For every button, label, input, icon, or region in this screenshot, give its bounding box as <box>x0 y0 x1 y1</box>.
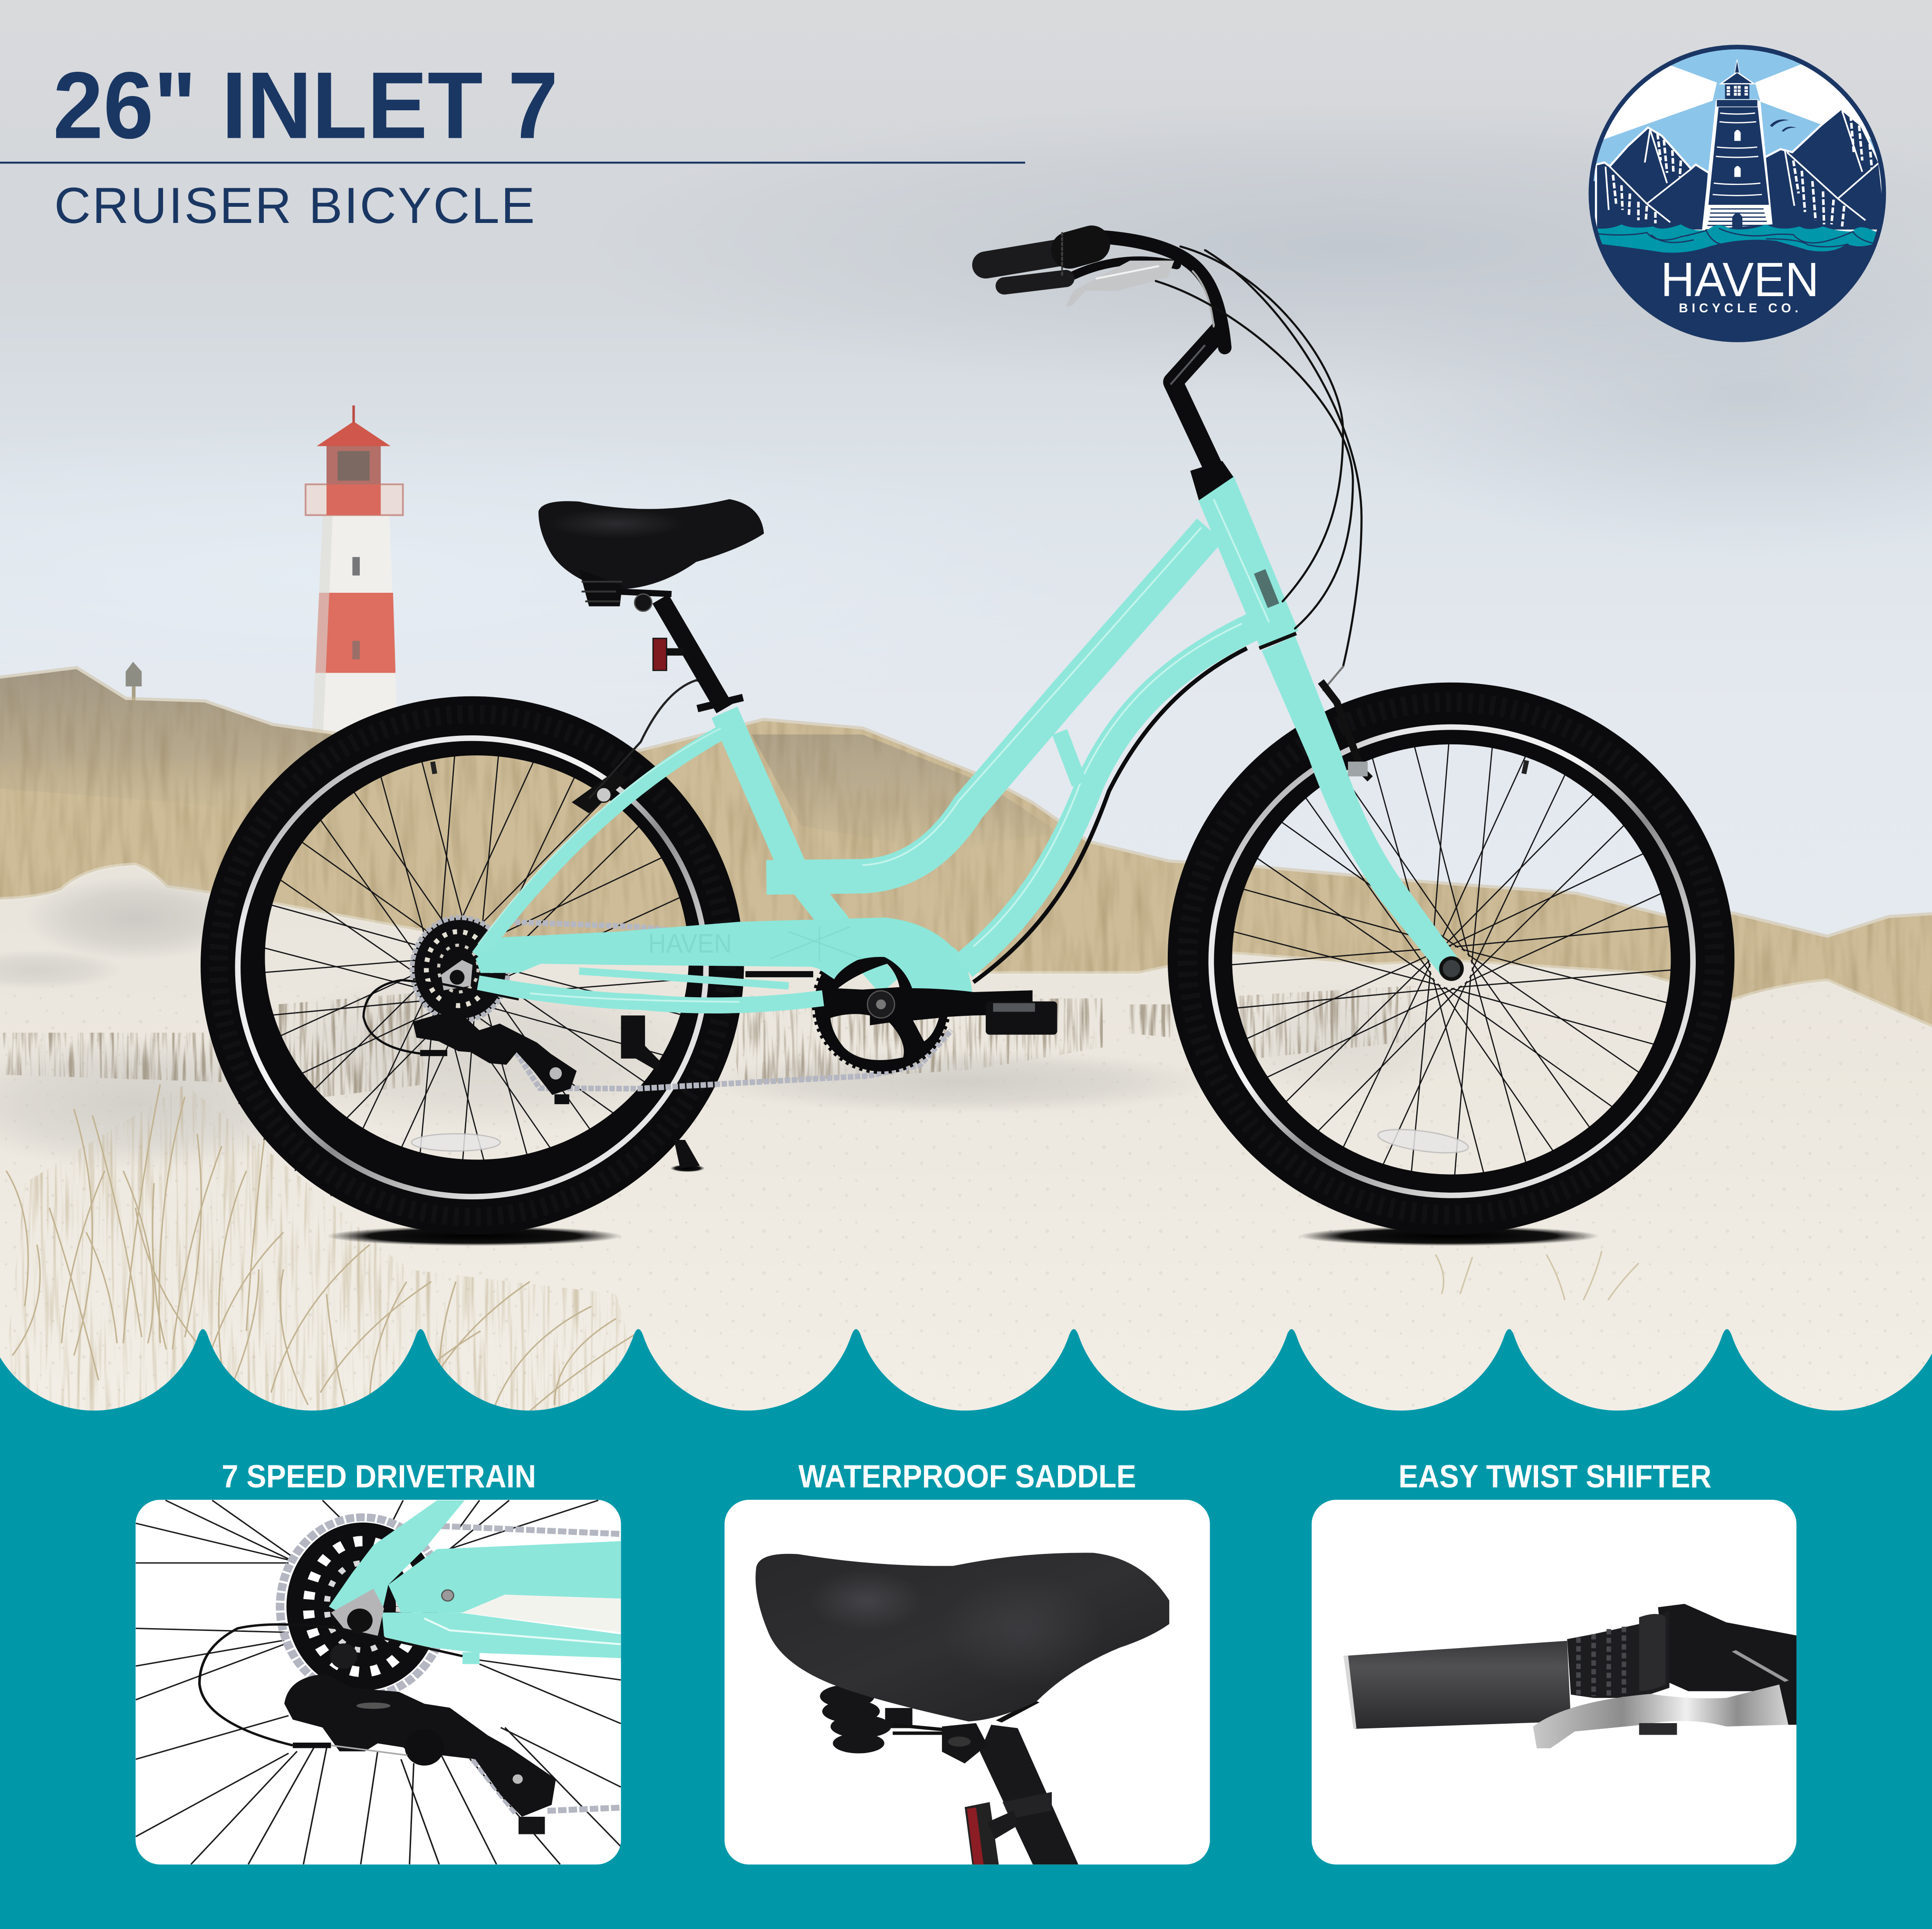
drivetrain spokes <box>136 1500 621 1864</box>
background lighthouse <box>306 405 403 739</box>
chainring <box>814 936 949 1072</box>
front wheel <box>1168 683 1734 1235</box>
pedal <box>986 1002 1057 1035</box>
beach background photo <box>0 0 1932 1417</box>
chain guard <box>476 917 972 992</box>
lower chain stay <box>478 984 823 1005</box>
brake lever <box>1533 1685 1788 1748</box>
clamp <box>942 1723 988 1764</box>
shifter cable <box>200 1624 462 1746</box>
grip <box>1344 1641 1571 1729</box>
rear dropout <box>441 960 472 990</box>
feature label: shifter: EASY TWIST SHIFTER <box>1398 1459 1711 1495</box>
panel: waterproof saddle <box>724 1500 1210 1864</box>
foreground dry grass <box>0 1084 1639 1417</box>
post reflector <box>965 1802 999 1864</box>
twist shifter ribs <box>1567 1611 1669 1698</box>
brake body and bar <box>1658 1604 1798 1725</box>
rear derailleur <box>364 980 577 1104</box>
beach grass tufts <box>0 986 1411 1103</box>
rear wheel <box>201 696 744 1235</box>
seat post <box>661 599 743 709</box>
fork <box>1262 636 1460 976</box>
logo wordmark: HAVEN <box>1661 253 1819 307</box>
brake cables <box>1156 246 1362 690</box>
rear cassette <box>412 917 508 1021</box>
feature label: saddle: WATERPROOF SADDLE <box>798 1459 1136 1495</box>
rear tire and rim <box>201 696 744 1235</box>
panel: 7 speed drivetrain <box>135 1500 621 1864</box>
seat tube seen through chainring <box>838 927 890 986</box>
feature label: drivetrain: 7 SPEED DRIVETRAIN <box>222 1459 536 1495</box>
head tube <box>1198 475 1298 647</box>
seat post <box>980 1725 1078 1864</box>
bicycle frame: HAVEN <box>648 928 732 959</box>
brace between tubes <box>1060 732 1079 784</box>
sand shadows <box>0 876 1466 1171</box>
brake lever <box>1066 260 1174 307</box>
sand ground <box>0 865 1932 1417</box>
derailleur <box>284 1674 556 1817</box>
frame stays <box>329 1500 465 1612</box>
saddle <box>538 499 764 611</box>
marker sign on dune <box>125 662 142 704</box>
handlebar <box>986 233 1362 690</box>
wave band <box>0 1329 1932 1929</box>
handlebar stem and headset <box>1171 330 1233 501</box>
front hub <box>1441 958 1462 979</box>
twist shifter <box>1069 244 1092 250</box>
inner chain stay <box>579 971 788 986</box>
rear reflector <box>412 1134 500 1151</box>
wheel ground shadows <box>327 1165 1599 1246</box>
top tube <box>767 530 1210 878</box>
saddle <box>756 1553 1169 1721</box>
logo artwork: lighthouse, mountains, waves <box>1590 49 1887 253</box>
guard emblem <box>770 927 863 961</box>
front brake <box>1321 682 1370 779</box>
crank and pedal <box>745 974 1057 1035</box>
header rule <box>0 162 1025 163</box>
down tube cable <box>973 648 1247 982</box>
grips <box>986 252 1060 265</box>
logo tagline: BICYCLE CO. <box>1679 301 1798 315</box>
subtitle: CRUISER BICYCLE <box>54 177 535 234</box>
title: 26" INLET 7 <box>53 52 558 158</box>
chain <box>442 1526 621 1813</box>
rear reflector on post <box>653 638 684 670</box>
cassette <box>280 1517 445 1696</box>
seat spring <box>820 1685 913 1753</box>
rear spokes <box>204 721 710 1234</box>
bicycle frame <box>441 475 1462 1005</box>
seat tube <box>724 712 838 927</box>
front reflector <box>1376 1125 1470 1157</box>
fork collar <box>1259 634 1296 648</box>
front spokes <box>1199 711 1704 1224</box>
dune grass left and centre <box>0 669 1932 1048</box>
logo: Haven Bicycle Co. <box>1588 45 1887 342</box>
kickstand <box>621 1015 700 1168</box>
rear brake and cable <box>572 680 715 813</box>
front tire and rim <box>1168 683 1734 1235</box>
down tube <box>963 626 1254 966</box>
panel: easy twist shifter <box>1312 1500 1798 1864</box>
seat stay <box>478 730 727 956</box>
drivetrain chain <box>508 922 951 1089</box>
